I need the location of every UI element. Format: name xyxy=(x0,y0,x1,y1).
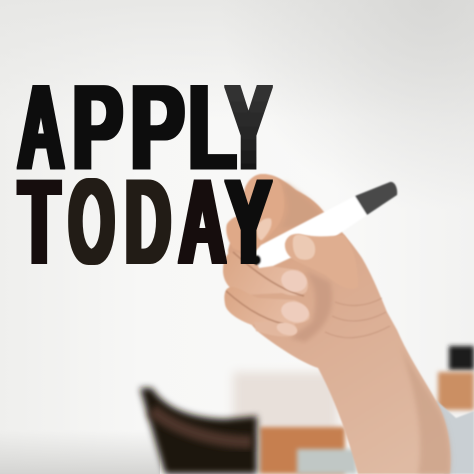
index nail xyxy=(257,218,272,240)
title: APPLY: Y xyxy=(226,60,271,194)
title: TODAY: T xyxy=(19,154,60,289)
sleeve xyxy=(436,400,474,474)
thumb xyxy=(285,234,358,289)
finger creases xyxy=(226,252,304,324)
middle finger xyxy=(223,252,308,296)
title: TODAY: D xyxy=(125,156,171,289)
shadow beside index finger xyxy=(280,182,322,228)
marker pen xyxy=(253,182,397,268)
hand and arm xyxy=(223,174,451,474)
palm shadow behind fingertips xyxy=(290,270,332,342)
title: TODAY: A xyxy=(179,156,226,289)
fingernails xyxy=(257,218,315,338)
title: TODAY: O xyxy=(69,155,115,290)
pen cap xyxy=(355,182,397,215)
title: APPLY: L xyxy=(188,60,236,194)
ring nail xyxy=(279,299,311,325)
title: APPLY: P xyxy=(130,60,185,194)
thumb nail xyxy=(293,234,315,260)
knuckle wrinkles xyxy=(325,298,390,338)
little finger xyxy=(254,322,296,337)
pen body xyxy=(254,196,367,268)
blurred office furniture xyxy=(140,346,474,474)
middle nail xyxy=(278,267,310,295)
title: TODAY xyxy=(19,154,271,290)
right side arm shading xyxy=(400,345,451,474)
ring finger xyxy=(224,287,310,325)
index finger xyxy=(226,174,284,252)
forearm and palm silhouette xyxy=(228,174,451,474)
title: APPLY: A xyxy=(18,61,64,195)
little finger nail xyxy=(275,320,299,338)
title: TODAY: Y xyxy=(226,155,271,289)
pen tip xyxy=(253,255,261,265)
title: APPLY xyxy=(18,60,271,195)
title: APPLY: P xyxy=(72,61,123,195)
